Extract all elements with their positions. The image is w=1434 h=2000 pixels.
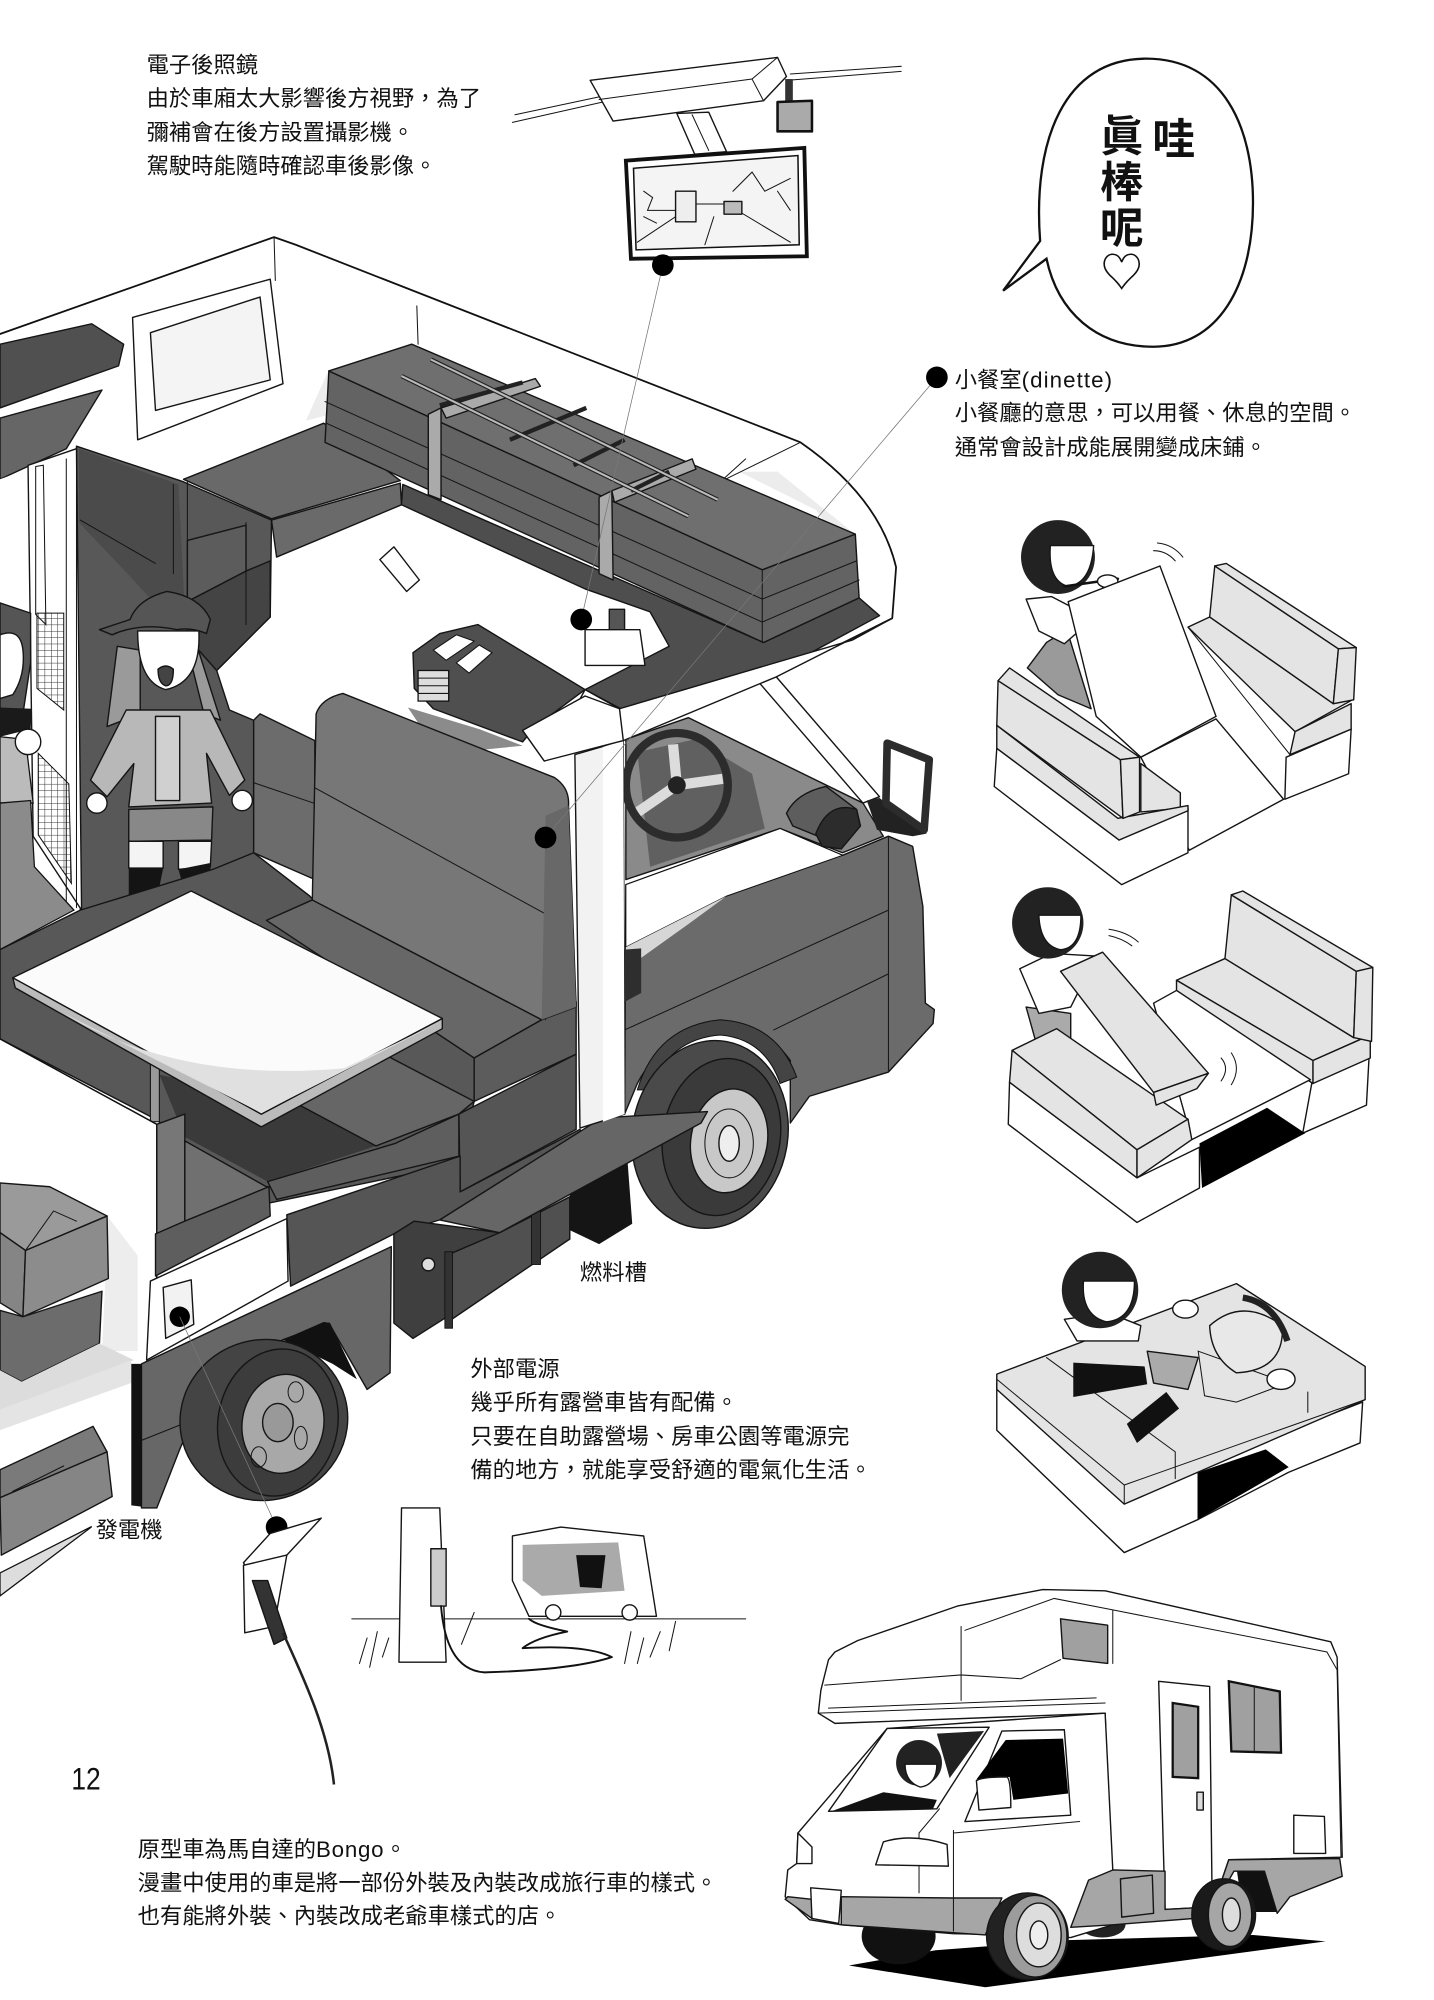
leader dot: mirror (652, 254, 674, 276)
power plug (243, 1518, 334, 1785)
side mirror (867, 743, 929, 836)
external power text: 幾乎所有露營車皆有配備。 (470, 1390, 738, 1415)
external power text: 外部電源 (470, 1357, 560, 1382)
girl with cap (87, 591, 252, 917)
front wheel (617, 1028, 803, 1241)
dark band under bed (402, 484, 880, 709)
table leaning (1068, 566, 1216, 757)
main illustration: camper van cutaway (0, 237, 934, 1596)
floor and seat base (0, 853, 584, 1286)
electronic mirror text: 由於車廂太大影響後方視野，為了 (147, 86, 481, 111)
seat back cushion main (312, 693, 576, 1020)
side window (965, 1730, 1071, 1822)
top cushions (997, 1284, 1365, 1504)
floor (1154, 990, 1310, 1140)
leader dot: interior mirror (570, 609, 592, 630)
rear seat stack (80, 423, 402, 670)
bubble text: ♡ (1100, 250, 1143, 298)
bubble text (1100, 114, 1196, 298)
driver (896, 1740, 942, 1787)
rear lower side and generator (0, 1344, 180, 1596)
right sofa (1177, 891, 1373, 1133)
bubble text: 哇 (1152, 116, 1196, 164)
speech bubble (1003, 59, 1253, 347)
electronic mirror text: 彌補會在後方設置攝影機。 (147, 120, 414, 145)
seat front face (474, 1002, 576, 1101)
shadow (849, 1935, 1326, 1987)
left seat (1008, 1029, 1199, 1222)
girl 1 (1021, 520, 1118, 709)
top left dark shelf (0, 324, 124, 605)
mattress on overcab bed (325, 344, 859, 642)
electronic mirror illustration (512, 57, 901, 259)
mattress straps (428, 408, 441, 500)
cab (785, 1713, 1113, 1938)
rear wheel (162, 1321, 366, 1519)
rear white wall (0, 1039, 157, 1410)
wall window (1229, 1681, 1281, 1753)
interior back wall (76, 446, 310, 920)
dinette step 2 (1008, 887, 1373, 1222)
right sofa (1188, 563, 1356, 799)
cab lines and headlights (797, 1809, 1080, 1931)
fuel tank (394, 1122, 632, 1338)
leader dot: plug (266, 1516, 287, 1538)
page number: 12 (71, 1761, 101, 1797)
sitting girl (1062, 1252, 1141, 1341)
left girl partial (0, 603, 74, 950)
bubble text: 棒 (1100, 160, 1143, 208)
step plate (440, 1112, 707, 1233)
generator label: 發電機 (96, 1517, 163, 1542)
cab interior (626, 677, 883, 880)
electronic mirror text: 電子後照鏡 (147, 53, 258, 78)
floor (1141, 719, 1284, 850)
body box (818, 1590, 1342, 1925)
dinette text: 小餐廳的意思，可以用餐、休息的空間。 (955, 401, 1356, 426)
external power text: 備的地方，就能享受舒適的電氣化生活。 (470, 1457, 872, 1482)
fuel tank label: 燃料槽 (580, 1260, 647, 1285)
dinette step 3 (997, 1252, 1365, 1553)
small camper (512, 1527, 656, 1620)
a-pillar (760, 677, 880, 803)
wheels (987, 1879, 1256, 1980)
electronic mirror text: 駕駛時能隨時確認車後影像。 (147, 153, 436, 178)
white base (997, 1383, 1198, 1553)
rear body side (141, 1247, 391, 1508)
dinette text: 通常會設計成能展開變成床鋪。 (955, 435, 1267, 460)
bottom caption: 原型車為馬自達的Bongo。 (138, 1837, 407, 1862)
white pillar and beam (523, 618, 892, 1128)
steering wheel (626, 733, 728, 837)
black opening (1199, 1108, 1305, 1188)
bottom caption (138, 1837, 717, 1928)
white plate with outlet (147, 1219, 288, 1360)
ladder rails (402, 359, 718, 516)
rear bench (156, 1141, 270, 1276)
table (13, 891, 442, 1127)
cab interior roof (937, 1731, 984, 1778)
dash cylinder (786, 786, 860, 843)
bubble text: 呢 (1100, 205, 1143, 253)
cab door body (625, 829, 934, 1123)
roof window (133, 279, 283, 440)
bottom caption: 漫畫中使用的車是將一部份外裝及內裝改成旅行車的樣式。 (138, 1870, 717, 1895)
door frame (28, 449, 82, 910)
overcab lines (818, 1598, 1341, 1857)
windshield (829, 1727, 989, 1811)
wall side panel (157, 1114, 185, 1234)
dinette text (955, 368, 1356, 460)
cardboard box (0, 1183, 108, 1382)
leader dot: seat (535, 827, 556, 848)
girl 2 (1012, 887, 1096, 1045)
opening (1198, 1449, 1289, 1519)
leader lines (180, 265, 937, 1527)
dashboard (408, 625, 585, 752)
overcab white shell (0, 237, 896, 714)
bubble text: 眞 (1100, 114, 1143, 162)
external power text: 只要在自助露營場、房車公園等電源完 (470, 1424, 849, 1449)
lying girl (1073, 1298, 1295, 1443)
far wheels (862, 1908, 1126, 1964)
dinette text: 小餐室(dinette) (955, 368, 1113, 393)
sun visor (380, 547, 419, 591)
door (1159, 1681, 1212, 1909)
lower gray skirts (785, 1870, 1211, 1935)
dash (831, 1792, 937, 1811)
overcab window (1061, 1619, 1108, 1663)
dinette step 1 (994, 520, 1356, 885)
interior rear-view mirror (585, 609, 645, 665)
seat cushion (266, 900, 542, 1058)
bottom caption: 也有能將外裝、內裝改成老爺車樣式的店。 (138, 1903, 561, 1928)
left sofa (994, 668, 1188, 885)
leader dot: dinette (926, 366, 948, 388)
rear wheel arch (1236, 1867, 1277, 1912)
hatch (1294, 1815, 1326, 1853)
exterior camper (785, 1590, 1342, 1987)
seat back cushion left (254, 714, 315, 880)
flap (1061, 952, 1208, 1105)
gray skirt (1211, 1858, 1342, 1913)
external power text (470, 1357, 872, 1482)
electronic mirror text (147, 53, 481, 178)
front plate (811, 1888, 841, 1923)
campsite power post scene (352, 1508, 746, 1672)
